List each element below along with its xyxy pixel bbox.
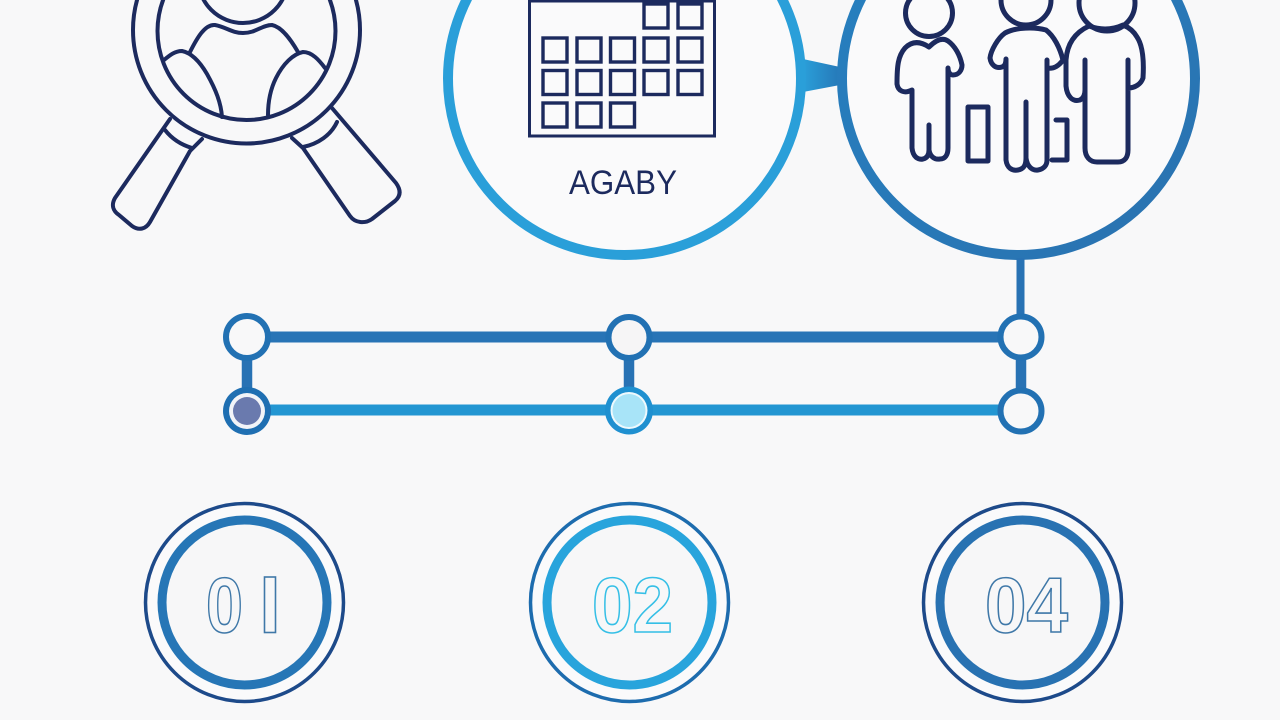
badge: number 04 xyxy=(924,504,1122,702)
icon: magnifying glass with person xyxy=(113,0,400,229)
node: bottom middle, light xyxy=(605,386,653,434)
node: bottom right xyxy=(1000,390,1042,432)
node: bottom left, dark xyxy=(223,387,271,435)
node: top right xyxy=(1000,316,1042,358)
badge: number 02 xyxy=(530,504,728,702)
number label 01: 0 xyxy=(206,561,243,649)
icon: calendar xyxy=(530,1,714,136)
chart: connected timeline network xyxy=(223,258,1042,435)
node: top middle xyxy=(608,317,650,358)
panel: family circle xyxy=(842,0,1195,255)
number label 04: 04 xyxy=(985,561,1068,649)
calendar label: AGABY xyxy=(569,164,677,202)
connector between calendar and family circles xyxy=(803,59,840,92)
icon: family with bars xyxy=(897,0,1143,170)
number label 02: 02 xyxy=(592,561,673,649)
node: top left xyxy=(226,316,268,358)
panel: calendar circle xyxy=(448,0,801,255)
number label 01 xyxy=(206,561,276,649)
badge: number 01 xyxy=(146,504,344,702)
